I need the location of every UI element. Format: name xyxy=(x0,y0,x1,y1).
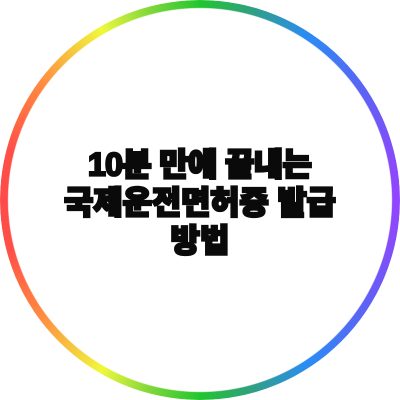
title: 국제운전면허증 발급 xyxy=(64,184,336,220)
title: 10분 만에 끝내는 xyxy=(88,146,312,182)
title: 방법 xyxy=(171,222,229,258)
